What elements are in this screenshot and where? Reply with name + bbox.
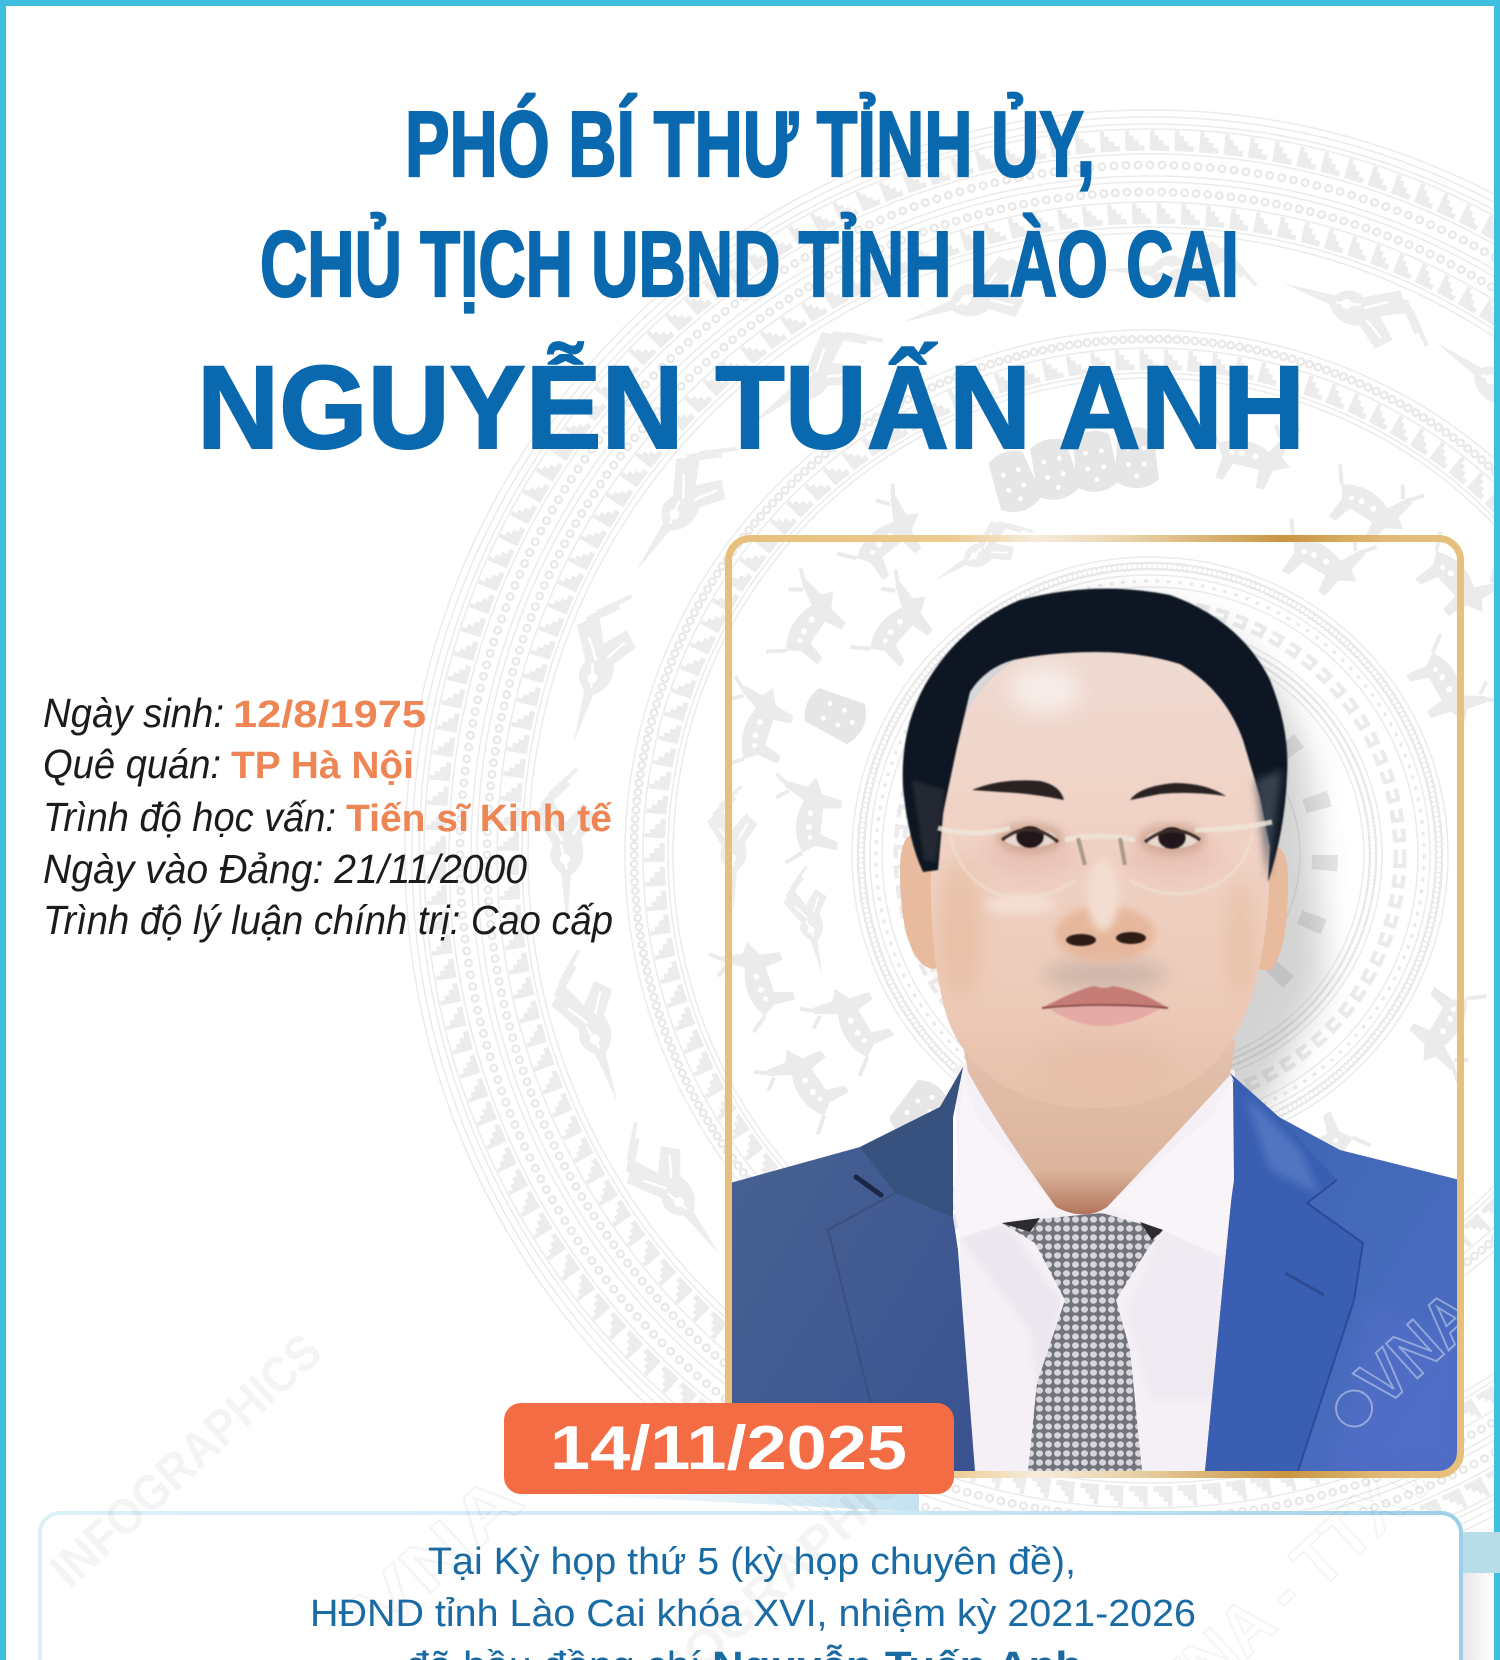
photo: ears — [900, 833, 1288, 970]
background: bronze drum pattern — [405, 110, 1500, 1600]
line 2: HĐND tỉnh Lào Cai khóa XVI, nhiệm kỳ 2021-2026 — [310, 1593, 1196, 1635]
photo: lips — [1042, 986, 1168, 1026]
side band: right of box — [1462, 1532, 1500, 1660]
photo: eyes — [996, 822, 1206, 855]
text block: election notice — [310, 1541, 1196, 1660]
photo: shirt collar — [953, 1080, 1234, 1235]
photo: hair — [903, 589, 1287, 882]
watermark: infographics: INFOGRAPHICS — [40, 1323, 332, 1598]
name: NGUYỄN TUẤN ANH — [197, 341, 1305, 474]
education: Tiến sĩ Kinh tế — [346, 798, 613, 840]
photo: face — [931, 640, 1269, 1108]
home town — [43, 741, 414, 787]
photo: facial shading — [938, 666, 1254, 1095]
photo: VNA watermark: VNA — [1343, 1276, 1490, 1420]
title line 1: PHÓ BÍ THƯ TỈNH ỦY, — [405, 92, 1095, 196]
date text: 14/11/2025 — [550, 1414, 907, 1483]
title — [197, 92, 1305, 474]
education — [43, 794, 613, 840]
date badge — [504, 1403, 954, 1494]
home town: Quê quán: — [43, 741, 221, 787]
photo: neck — [962, 1040, 1236, 1214]
portrait photo — [730, 589, 1490, 1471]
education: Trình độ học vấn: — [43, 794, 336, 840]
birth date — [43, 690, 426, 736]
watermarks: box area: VNA — [337, 1458, 537, 1651]
photo: right jacket — [1205, 1073, 1460, 1471]
photo: glasses — [938, 822, 1272, 898]
line 3 — [406, 1643, 1082, 1660]
photo: head shadow — [930, 600, 1325, 1120]
photo: tie — [1002, 1213, 1163, 1471]
panel: text box — [40, 1513, 1461, 1660]
birth date: 12/8/1975 — [233, 694, 426, 736]
photo: eyebrows — [972, 780, 1226, 800]
photo: left jacket — [730, 1067, 975, 1471]
line 1: Tại Kỳ họp thứ 5 (kỳ họp chuyên đề), — [428, 1541, 1076, 1583]
photo: VNA watermark — [1313, 1276, 1490, 1447]
photo frame — [728, 538, 1460, 1474]
badge shadow — [560, 1494, 919, 1512]
birth date: Ngày sinh: — [43, 690, 224, 736]
watermarks: box area — [346, 1480, 1429, 1660]
political theory: Trình độ lý luận chính trị: Cao cấp — [43, 897, 613, 943]
photo: shirt — [955, 1065, 1235, 1471]
photo: nose — [1055, 859, 1155, 962]
text block: personal details — [43, 690, 613, 943]
home town: TP Hà Nội — [231, 745, 414, 787]
party date: Ngày vào Đảng: 21/11/2000 — [43, 846, 527, 892]
